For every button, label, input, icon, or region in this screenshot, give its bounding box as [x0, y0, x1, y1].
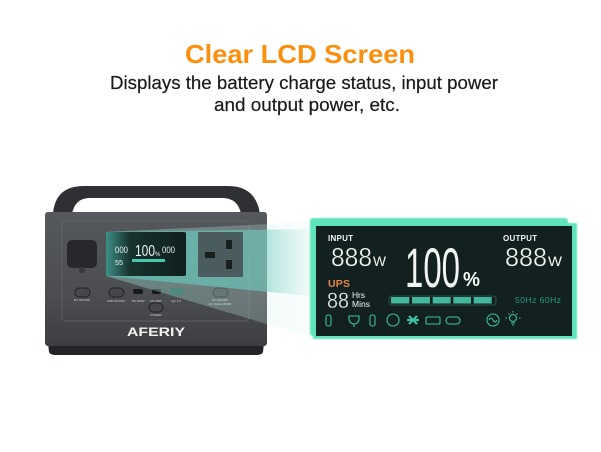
panel screen — [316, 226, 572, 336]
ups readout: UPS — [328, 278, 350, 290]
input readout: 888 — [331, 242, 372, 272]
logo: AFERIY — [127, 325, 185, 339]
subtitle: Displays the battery charge status, input power — [110, 73, 498, 93]
icon: battery — [370, 315, 375, 326]
usb ports — [133, 288, 183, 295]
port labels: DC ON/OFF — [74, 298, 90, 302]
output readout — [503, 234, 563, 272]
device screen: % — [155, 252, 161, 258]
port labels — [74, 298, 232, 317]
input readout: INPUT — [328, 234, 353, 243]
port labels: POWER — [150, 313, 162, 317]
power station device — [45, 186, 267, 355]
icon: usb a — [426, 317, 440, 324]
ups readout: Hrs — [352, 290, 365, 300]
input readout — [328, 234, 387, 272]
icon: light bulb — [506, 311, 520, 325]
battery percent: 100 — [405, 236, 460, 299]
port labels: AC ON/OFF — [212, 298, 228, 302]
device screen: 000 — [162, 245, 175, 255]
light beam — [106, 222, 310, 337]
body — [45, 212, 267, 346]
panel glow border — [310, 218, 577, 339]
base — [48, 343, 264, 355]
title: Clear LCD Screen — [185, 39, 415, 69]
ups readout: Mins — [352, 299, 370, 309]
icon: fan — [407, 316, 419, 324]
device screen — [106, 232, 186, 276]
port labels: PD 20W — [150, 299, 162, 303]
icon: eco mode — [387, 314, 399, 326]
handle — [53, 186, 260, 214]
battery percent: % — [463, 269, 480, 291]
port labels: PD 100W — [132, 299, 145, 303]
subtitle — [110, 73, 498, 115]
ac socket — [198, 232, 243, 277]
port labels: AC Output 800W — [209, 302, 232, 306]
enlarged lcd panel — [310, 218, 577, 339]
port labels: QC 3.0 — [171, 299, 181, 303]
icon: plug — [349, 316, 359, 327]
output readout: W — [548, 253, 563, 269]
output readout: OUTPUT — [503, 234, 537, 243]
output readout: 888 — [505, 242, 547, 272]
ups readout: 88 — [327, 288, 349, 313]
icon: temperature — [326, 315, 331, 326]
ups readout — [327, 278, 370, 313]
device screen: 100 — [135, 243, 155, 260]
icon: usb c — [446, 317, 460, 324]
status icons — [326, 311, 520, 327]
frequency labels: 50Hz 60Hz — [515, 295, 561, 305]
device screen: 000 — [115, 245, 128, 255]
subtitle: and output power, etc. — [214, 95, 400, 115]
power port cover — [67, 240, 97, 273]
input readout: W — [373, 253, 387, 269]
icon: ac wave — [487, 314, 499, 326]
port labels: USB ON/OFF — [107, 299, 125, 303]
battery bar — [389, 296, 496, 305]
device screen: 55 — [115, 260, 123, 267]
control buttons — [75, 288, 228, 312]
